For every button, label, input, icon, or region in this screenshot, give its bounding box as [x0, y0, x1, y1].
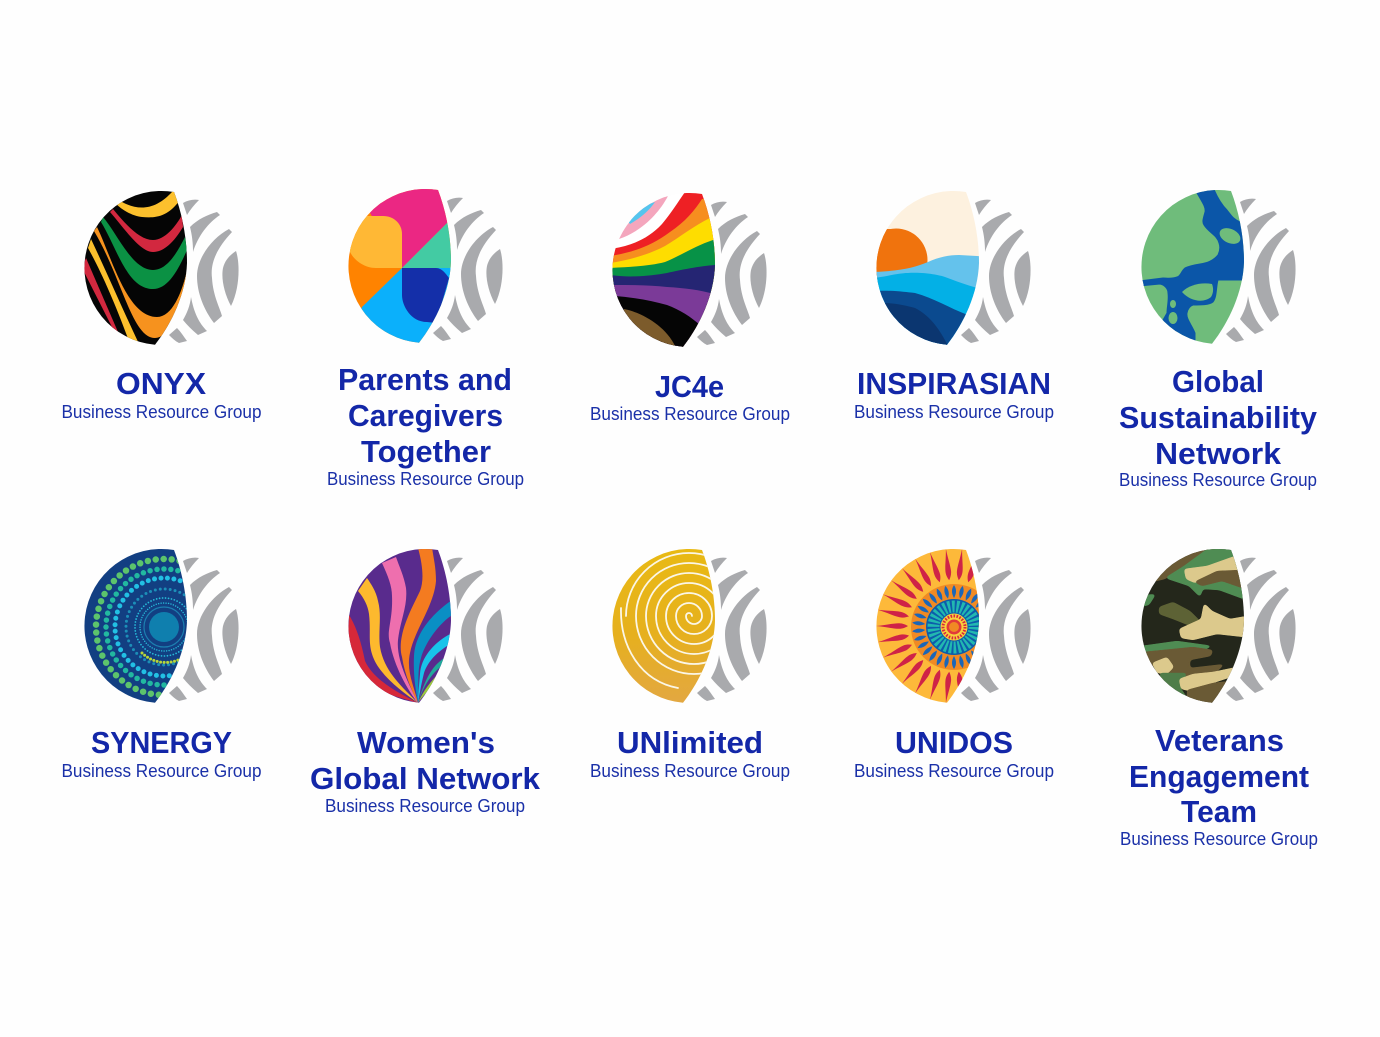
heading: Global Sustainability Network: Sustainability	[1119, 400, 1318, 435]
icon: UNIDOS logo	[876, 549, 1031, 703]
subtitle: JC4e: Business Resource Group	[590, 404, 790, 424]
icon: INSPIRASIAN logo	[876, 191, 1031, 345]
heading: Veterans Engagement Team: Team	[1181, 794, 1257, 829]
heading: Women's Global Network	[310, 725, 541, 796]
card: JC4e	[590, 180, 790, 424]
subtitle: Global Sustainability Network: Business Resource Group	[1119, 470, 1317, 490]
card: Women's Global Network	[310, 536, 541, 816]
heading: UNIDOS: UNIDOS	[895, 725, 1013, 760]
heading: Parents and Caregivers Together: Together	[361, 434, 491, 469]
card: UNIDOS	[855, 549, 1054, 781]
subtitle: UNIDOS: Business Resource Group	[854, 761, 1054, 781]
heading: Veterans Engagement Team	[1129, 723, 1309, 829]
card: UNlimited	[590, 536, 790, 781]
subtitle: INSPIRASIAN: Business Resource Group	[854, 402, 1054, 422]
icon: Veterans Engagement Team logo	[1141, 549, 1296, 703]
subtitle: Parents and Caregivers Together: Business Resource Group	[327, 469, 524, 489]
subtitle: Veterans Engagement Team: Business Resource Group	[1120, 829, 1318, 849]
heading: ONYX: ONYX	[116, 366, 206, 401]
heading: Veterans Engagement Team: Engagement	[1129, 759, 1309, 794]
heading: JC4e: JC4e	[655, 369, 724, 404]
card: INSPIRASIAN	[854, 178, 1054, 422]
card: ONYX	[62, 178, 262, 422]
subtitle: SYNERGY: Business Resource Group	[62, 761, 262, 781]
icon: SYNERGY logo	[84, 549, 239, 703]
card: Global Sustainability Network	[1119, 177, 1318, 490]
icon: Global Sustainability Network logo	[1141, 190, 1296, 344]
heading: Parents and Caregivers Together	[338, 362, 512, 469]
heading: UNlimited: UNlimited	[617, 725, 763, 760]
icon: Parents and Caregivers logo	[348, 189, 502, 343]
subtitle: Women's Global Network: Business Resource Group	[325, 796, 525, 816]
card: SYNERGY	[62, 536, 262, 781]
icon: ONYX logo	[84, 191, 239, 345]
heading: Global Sustainability Network	[1119, 364, 1318, 471]
heading: Women's Global Network: Global Network	[310, 761, 541, 796]
icon: UNlimited logo	[612, 549, 767, 703]
subtitle: ONYX: Business Resource Group	[62, 402, 262, 422]
heading: Parents and Caregivers Together: Caregivers	[348, 398, 503, 433]
icon: JC4e logo	[612, 193, 766, 347]
heading: Veterans Engagement Team: Veterans	[1155, 723, 1284, 758]
heading: SYNERGY: SYNERGY	[91, 725, 232, 760]
card: Veterans Engagement Team	[1120, 536, 1318, 849]
card: Parents and Caregivers Together	[327, 176, 524, 489]
heading: Women's Global Network: Women's	[357, 725, 495, 760]
subtitle: UNlimited: Business Resource Group	[590, 761, 790, 781]
heading: Global Sustainability Network: Network	[1155, 436, 1282, 471]
heading: INSPIRASIAN: INSPIRASIAN	[857, 366, 1051, 401]
icon: Women's Global Network logo	[348, 549, 503, 703]
heading: Global Sustainability Network: Global	[1172, 364, 1264, 399]
heading: Parents and Caregivers Together: Parents and	[338, 362, 512, 397]
